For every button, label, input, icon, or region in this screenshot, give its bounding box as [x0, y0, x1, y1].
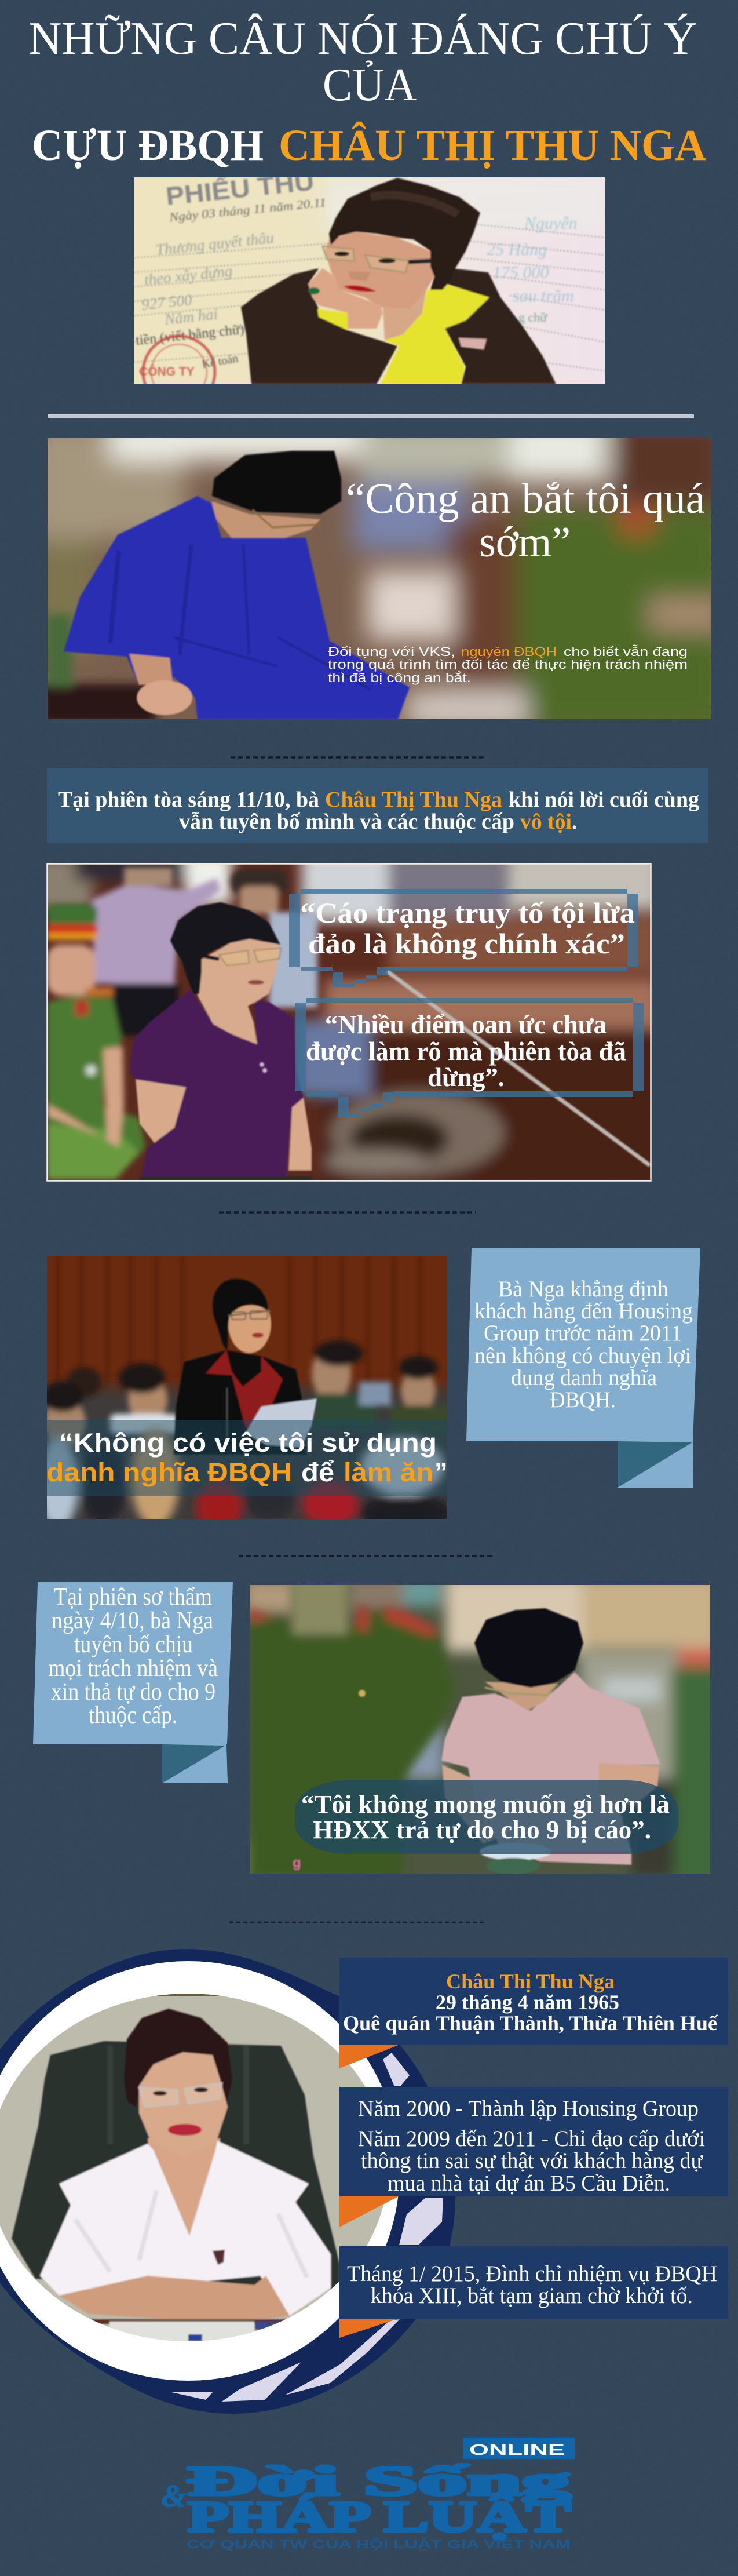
- photo: woman in front of receipt: Kế toán: [201, 352, 239, 371]
- callout: phiên sơ thẩm: [33, 1582, 233, 1783]
- photo: woman in front of receipt: [134, 177, 605, 384]
- photo: woman in pink led by officer: [243, 1576, 724, 1886]
- photo: woman in front of receipt: Năm hai: [163, 305, 218, 328]
- face: [325, 232, 434, 309]
- callout: housing group: Bà Nga khẳng định: [498, 1277, 668, 1302]
- title: CỰU ĐBQH: [32, 121, 264, 170]
- bio box 1: Quê quán Thuận Thành, Thừa Thiên Huế: [343, 2012, 718, 2035]
- title: CỦA: [323, 59, 417, 111]
- callout: housing group: khách hàng đến Housing: [474, 1299, 693, 1324]
- photo: woman in front of receipt: Nguyễn: [524, 214, 578, 233]
- summary banner: Tại phiên tòa sáng 11/10, bà: [58, 788, 319, 812]
- logo: [162, 2438, 575, 2551]
- quote: không sử dụng danh nghĩa: ”: [434, 1458, 447, 1487]
- caption on photo: cho biết vẫn đang: [564, 644, 688, 659]
- callout: housing group: [466, 1248, 700, 1488]
- photo: woman in front of receipt: PHIẾU THU: [165, 166, 316, 211]
- quote: bắt quá sớm: [346, 475, 705, 566]
- photo: woman in front of receipt: Ngày 03 tháng 11 năm 20.11: [168, 195, 327, 224]
- summary banner: vô tội: [520, 810, 572, 834]
- photo: woman in front of receipt: tiền (viết bằng chữ): [135, 322, 245, 348]
- bio box 2: mua nhà tại dự án B5 Cầu Diễn.: [388, 2171, 670, 2196]
- hand: [308, 268, 383, 329]
- callout: housing group: dụng danh nghĩa: [511, 1365, 657, 1390]
- title: NHỮNG CÂU NÓI ĐÁNG CHÚ Ý: [28, 12, 697, 64]
- jacket left: [241, 268, 397, 384]
- callout: phiên sơ thẩm: ngày 4/10, bà Nga: [52, 1608, 213, 1634]
- quote: không sử dụng danh nghĩa: để: [301, 1458, 334, 1487]
- officer: [47, 996, 145, 1176]
- callout: housing group: ĐBQH.: [550, 1387, 616, 1412]
- callout: phiên sơ thẩm: thuộc cấp.: [89, 1702, 177, 1729]
- speech frame 1: [289, 889, 638, 987]
- summary banner: .: [572, 810, 577, 834]
- caption on photo: Đối tụng với VKS,: [328, 644, 455, 659]
- quote 2: [306, 1010, 626, 1092]
- title: CHÂU THỊ THU NGA: [279, 121, 706, 170]
- logo: &: [162, 2479, 186, 2513]
- logo: CƠ QUAN TW CỦA HỘI LUẬT GIA VIỆT NAM: [187, 2537, 571, 2551]
- bio box 2: Năm 2000 - Thành lập Housing Group: [358, 2096, 699, 2121]
- portrait circle: [0, 1949, 455, 2414]
- photo: woman in front of receipt: theo xây dựng: [143, 262, 233, 289]
- blue uniform: [64, 496, 410, 719]
- quote overlay: trả tự do: [295, 1780, 678, 1854]
- quote 1: “Cáo trạng truy tố tội lừa: [300, 897, 635, 929]
- lips: [344, 285, 377, 292]
- quote: bắt quá sớm: “Công an bắt tôi quá: [346, 475, 705, 523]
- quote: không sử dụng danh nghĩa: “Không có việc tôi sử dụng: [59, 1428, 437, 1458]
- quote 1: đảo là không chính xác”: [308, 927, 625, 960]
- callout: housing group: nên không có chuyện lợi: [474, 1343, 691, 1368]
- hair: [212, 451, 341, 514]
- yellow shirt: [381, 284, 489, 384]
- photo: woman in pink led by officer: g: [293, 1855, 301, 1871]
- hair: [329, 178, 480, 290]
- bio box 2: [339, 2087, 728, 2227]
- divider bar: [48, 414, 694, 418]
- callout: phiên sơ thẩm: mọi trách nhiệm và: [48, 1655, 218, 1682]
- callout: phiên sơ thẩm: Tại phiên sơ thẩm: [54, 1584, 212, 1611]
- quote: không sử dụng danh nghĩa: [46, 1428, 447, 1487]
- callout: phiên sơ thẩm: xin thả tự do cho 9: [51, 1679, 215, 1706]
- title: [28, 12, 706, 170]
- logo: ONLINE: [469, 2441, 565, 2458]
- photo: woman in front of receipt: g chữ: [518, 310, 547, 325]
- bio box 1: [339, 1958, 728, 2068]
- bio box 3: khóa XIII, bắt tạm giam chờ khởi tố.: [371, 2283, 693, 2308]
- photo: woman in front of receipt: 175 000: [492, 263, 549, 282]
- caption on photo: [328, 644, 688, 685]
- callout: phiên sơ thẩm: tuyên bố chịu: [74, 1631, 193, 1658]
- photo: woman in purple at the court: [35, 852, 663, 1191]
- bio box 2: thông tin sai sự thật với khách hàng dự: [361, 2148, 704, 2173]
- bio box 1: 29 tháng 4 năm 1965: [436, 1991, 619, 2014]
- logo: Đời Sống: [187, 2458, 571, 2504]
- summary banner: vẫn tuyên bố mình và các thuộc cấp: [179, 810, 514, 834]
- quote 2: dừng”.: [428, 1063, 505, 1092]
- photo: woman in front of receipt: 25 Hàng: [487, 240, 547, 259]
- photo: speaking at the National Assembly: [35, 1256, 463, 1531]
- photo: woman in front of receipt: Thương quyết thâu: [155, 229, 275, 258]
- glasses: [323, 246, 408, 272]
- bio box 1: Châu Thị Thu Nga: [446, 1970, 615, 1993]
- logo: PHÁP LUẬT: [188, 2493, 571, 2541]
- quote: không sử dụng danh nghĩa: danh nghĩa ĐBQH: [46, 1458, 292, 1487]
- bio box 2: Năm 2009 đến 2011 - Chỉ đạo cấp dưới: [358, 2126, 705, 2151]
- callout: housing group: Group trước năm 2011: [484, 1321, 682, 1346]
- speech frame 2: [295, 998, 644, 1118]
- caption on photo: nguyên ĐBQH: [461, 644, 557, 659]
- jacket right: [445, 268, 556, 384]
- summary banner: khi nói lời cuối cùng: [509, 788, 699, 812]
- photo: woman in front of receipt: 927 500: [140, 291, 193, 314]
- photo: woman in front of receipt: CÔNG TY: [139, 365, 195, 378]
- bio box 3: Tháng 1/ 2015, Đình chỉ nhiệm vụ ĐBQH: [347, 2261, 717, 2286]
- quote 2: được làm rõ mà phiên tòa đã: [306, 1037, 626, 1066]
- quote: bắt quá sớm: sớm”: [479, 519, 571, 566]
- portrait photo: [0, 1988, 405, 2347]
- quote overlay: trả tự do: “Tôi không mong muốn gì hơn là: [301, 1790, 670, 1819]
- caption on photo: thì đã bị công an bắt.: [328, 671, 471, 685]
- caption on photo: trong quá trình tìm đối tác để thực hiện trách nhiệm: [328, 657, 688, 672]
- hand: [129, 654, 173, 685]
- quote overlay: trả tự do: HĐXX trả tự do cho 9 bị cáo”.: [313, 1816, 651, 1844]
- photo: woman in front of receipt: sau trăm: [513, 286, 574, 305]
- summary banner: [47, 768, 708, 843]
- quote 2: “Nhiều điểm oan ức chưa: [325, 1010, 607, 1039]
- quote: không sử dụng danh nghĩa: làm ăn: [344, 1458, 433, 1487]
- photo: woman in blue uniform: [48, 438, 711, 719]
- quote 1: [300, 897, 635, 960]
- summary banner: Châu Thị Thu Nga: [325, 788, 502, 812]
- bio box 3: [339, 2246, 728, 2338]
